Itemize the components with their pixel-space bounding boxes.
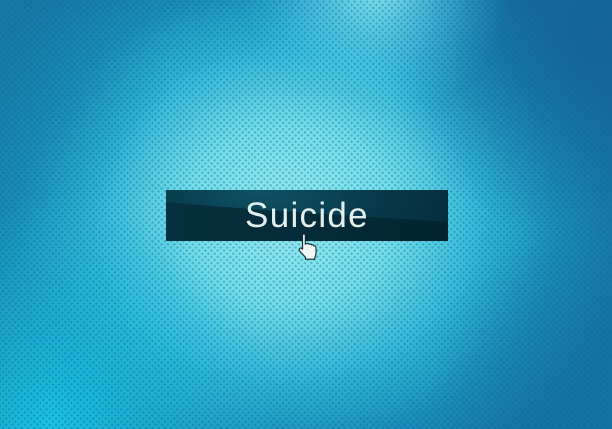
button panel [166, 190, 448, 241]
icon: hand cursor [298, 234, 317, 260]
button label: Suicide [245, 196, 369, 235]
